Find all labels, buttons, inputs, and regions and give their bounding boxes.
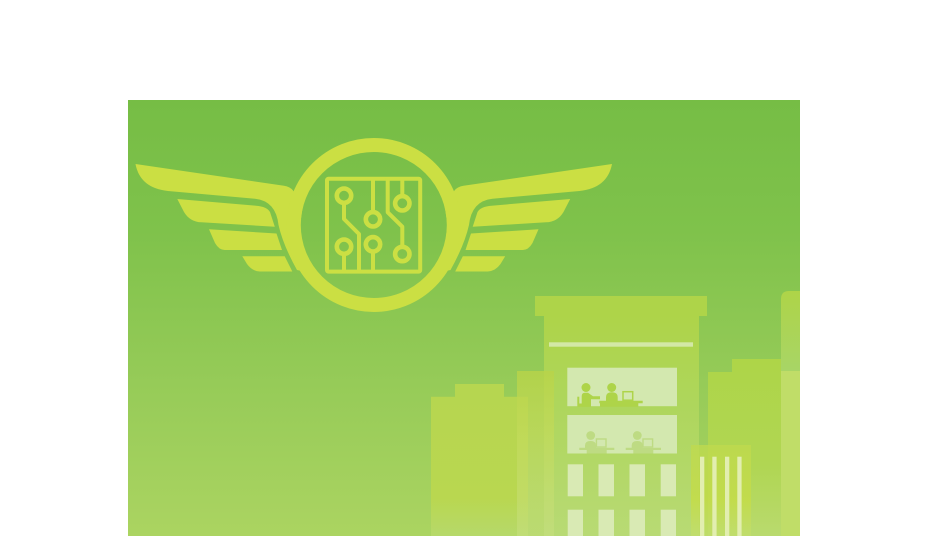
person at desk faint left (579, 431, 614, 454)
small front building (691, 445, 751, 536)
office window lower (567, 415, 677, 454)
left wing (136, 164, 306, 272)
far right building (781, 291, 800, 536)
winged circuit emblem (136, 145, 612, 305)
lower windows (568, 464, 676, 536)
office window upper (567, 368, 677, 407)
roof cap (535, 296, 707, 316)
middle translucent building (517, 371, 554, 536)
roof light band (549, 342, 693, 347)
person at desk left (577, 383, 600, 407)
right building (708, 359, 781, 536)
ring (294, 145, 454, 305)
main office building (535, 296, 707, 536)
building body (544, 316, 699, 536)
person at desk faint right (626, 431, 661, 454)
left building (431, 384, 528, 536)
person at desk right with laptop (599, 383, 643, 407)
icon: circuit board (327, 178, 420, 272)
right wing (442, 164, 612, 272)
stripes (700, 457, 742, 536)
panel: green background (128, 100, 800, 536)
